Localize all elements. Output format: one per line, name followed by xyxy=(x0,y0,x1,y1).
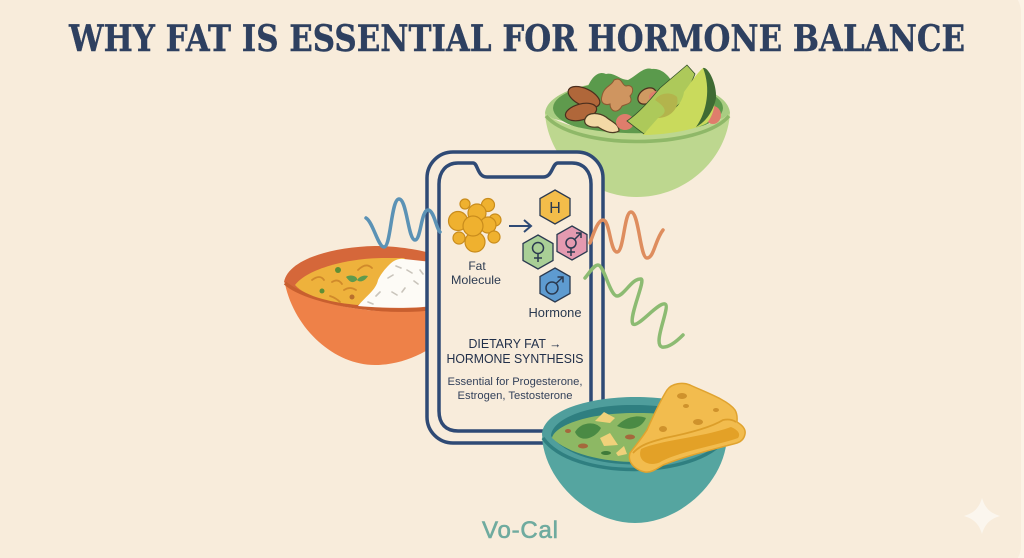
hexagon: H xyxy=(540,190,570,224)
fat molecule label: Fat xyxy=(468,259,486,273)
icon: orange dal and rice bowl xyxy=(284,246,450,365)
wave: blue xyxy=(366,199,440,247)
hexagon: H: H xyxy=(549,200,561,217)
phone frame xyxy=(427,152,603,443)
icon: teal curry bowl with flatbread xyxy=(542,383,745,523)
hexagon: green female symbol xyxy=(523,235,553,269)
cashew xyxy=(585,114,619,133)
dal xyxy=(295,258,405,305)
walnut xyxy=(601,79,633,111)
tomato xyxy=(649,91,665,103)
text: hormone synthesis heading: HORMONE SYNTHESIS xyxy=(446,352,584,366)
almonds xyxy=(563,82,659,124)
flatbread xyxy=(629,383,745,472)
fat molecule label line 2: Molecule xyxy=(451,273,501,287)
text: dietary fat heading: DIETARY FAT → xyxy=(468,337,562,351)
hexagon: pink intersex symbol xyxy=(557,226,587,260)
arrow: fat to hormone xyxy=(509,220,531,232)
icon: sparkle xyxy=(964,498,1000,534)
hormone label: Hormone xyxy=(528,306,582,320)
avocado back slice xyxy=(627,65,695,134)
avocado pit xyxy=(655,94,678,118)
curry pieces xyxy=(575,423,601,439)
avocado front slice xyxy=(643,68,715,135)
lettuce xyxy=(586,68,672,100)
rice xyxy=(358,259,432,308)
icon: green salad bowl xyxy=(545,65,730,197)
hexagon: blue male symbol xyxy=(540,268,570,302)
text: essential for: Essential for Progesterone, xyxy=(448,376,582,388)
logo: Vo-Cal: Vo-Cal xyxy=(482,517,558,544)
text: hormones list: Estrogen, Testosterone xyxy=(458,390,572,402)
wave: orange xyxy=(590,212,663,258)
icon: fat molecule xyxy=(448,198,501,252)
wave: green xyxy=(585,265,683,347)
